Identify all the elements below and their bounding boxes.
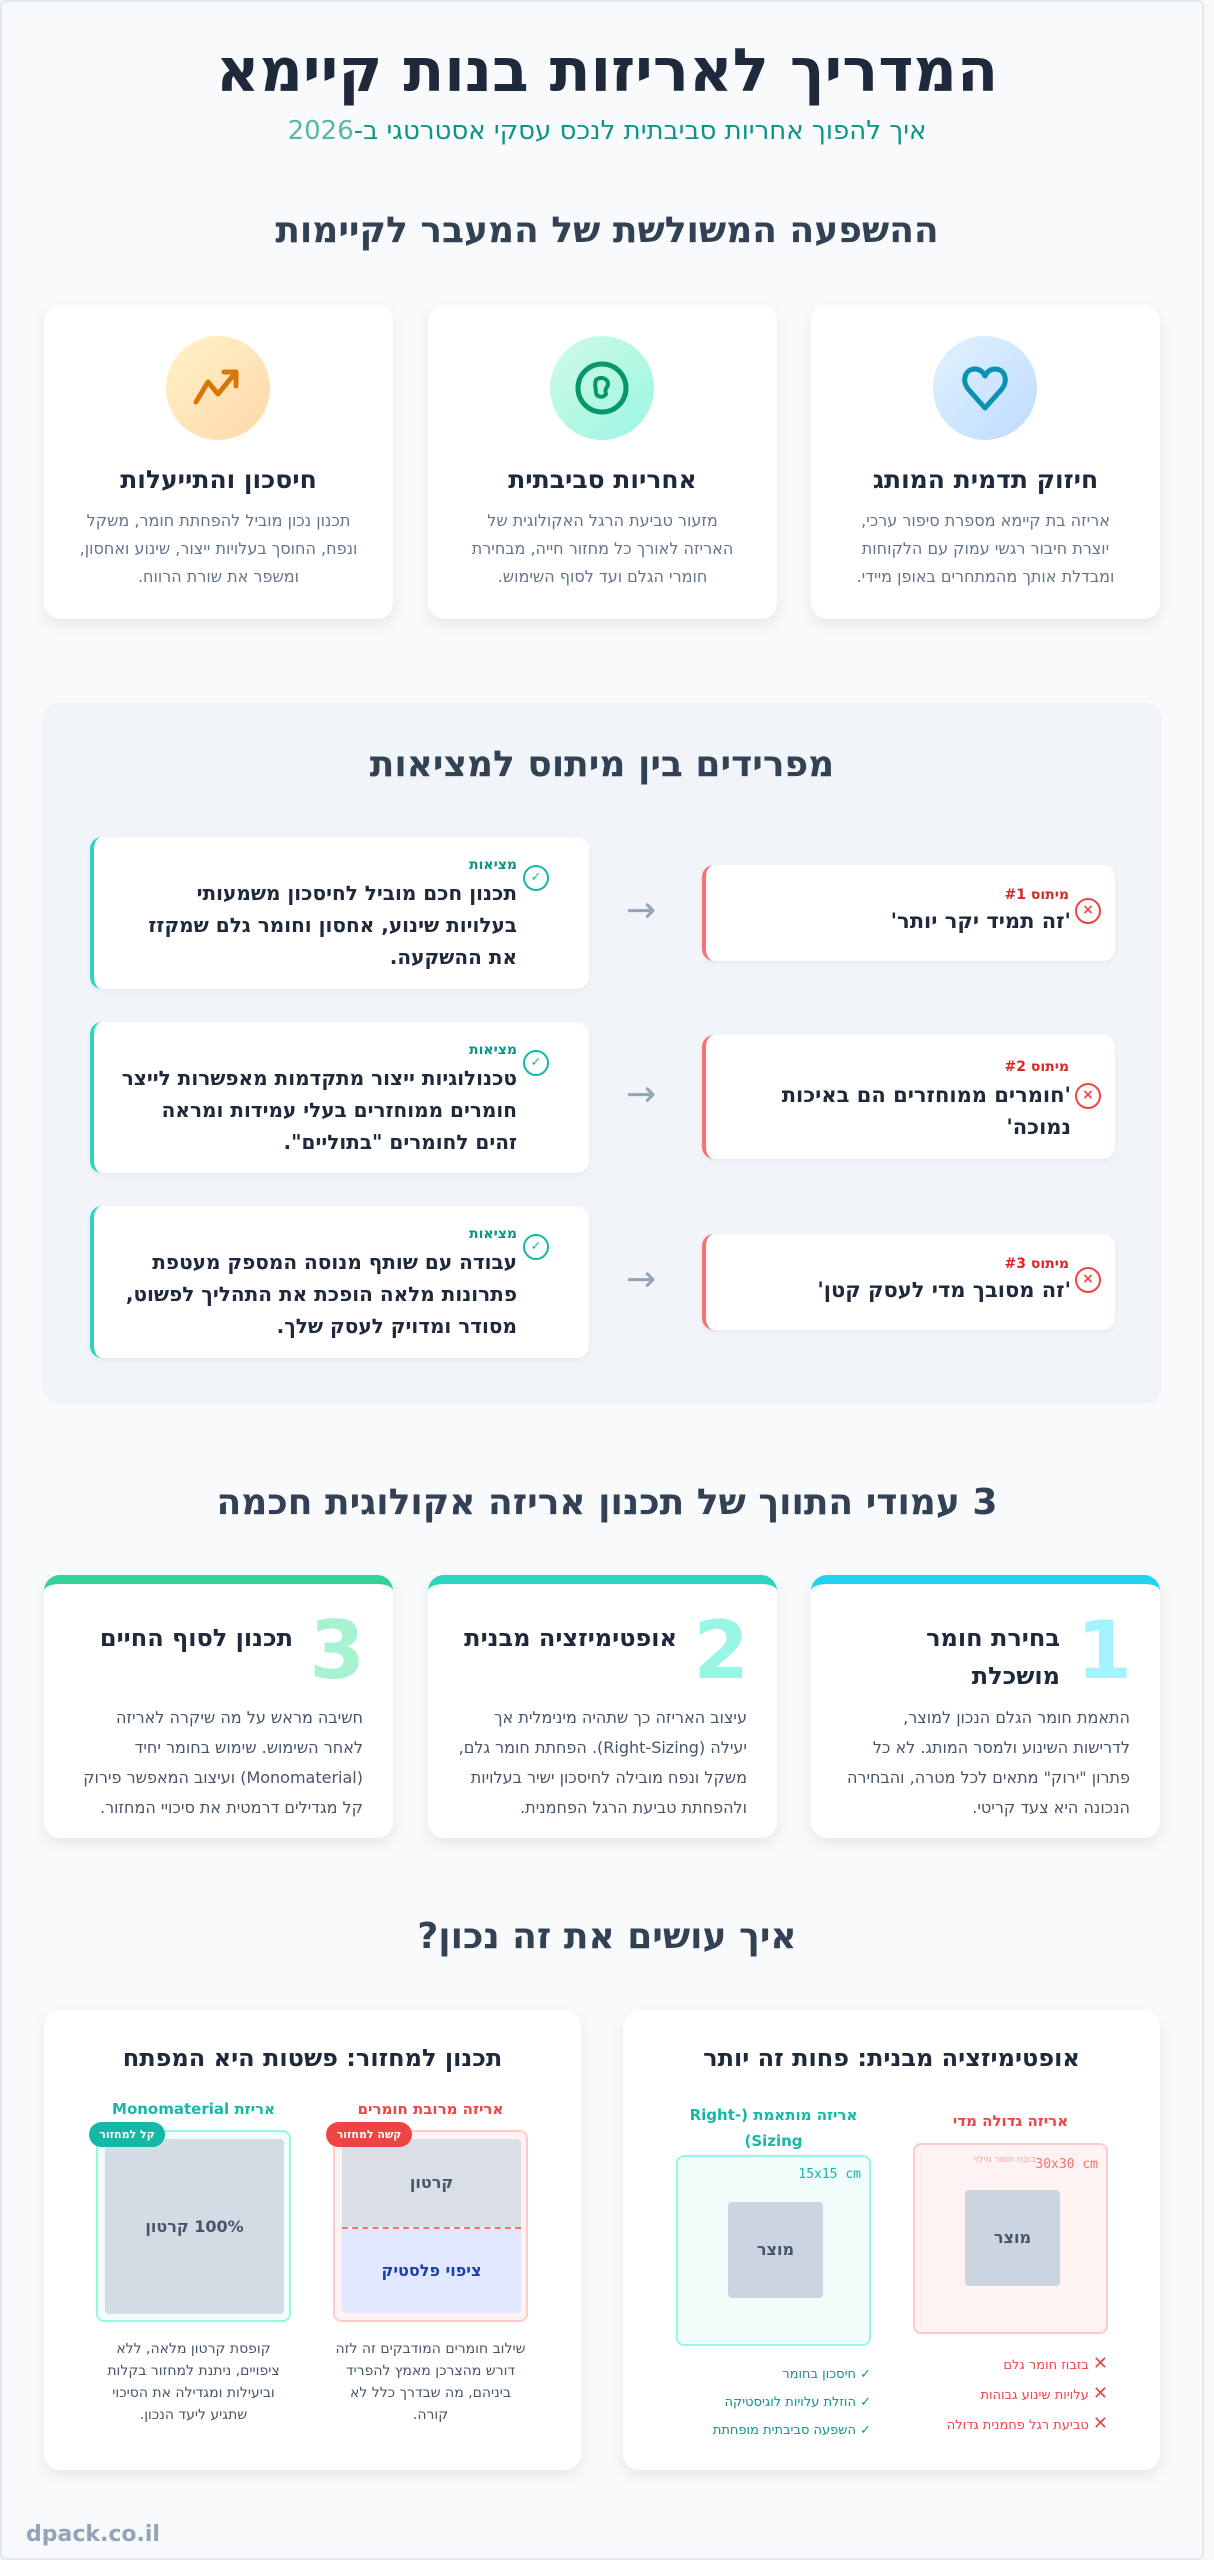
- icon: x: [1075, 1083, 1101, 1109]
- arrow 1: →: [626, 890, 656, 931]
- pillar text: עיצוב האריזה כך שתהיה מינימלית אך יעילה (Right-Sizing). הפחתת חומר גלם, משקל ונפח מובילה לחיסכון ישיר בעלויות ולהפחתת טביעת הרגל הפחמנית.: [459, 1708, 747, 1817]
- right-sized box: [676, 2106, 871, 2438]
- number: 3: [309, 1604, 365, 1697]
- icon: check: ✓: [531, 1055, 541, 1070]
- icon: x: ×: [1082, 902, 1094, 918]
- icon: check: [523, 865, 549, 891]
- reality 2: מציאות: [469, 1042, 517, 1058]
- mixed-material box: קרטון: [410, 2173, 453, 2192]
- arrow 2: →: [626, 1074, 656, 1115]
- right-sized box: 15x15 cm: [798, 2167, 861, 2182]
- oversized box: מוצר: [994, 2228, 1031, 2247]
- reality 2: [90, 1022, 589, 1173]
- reality 1: מציאות: [469, 857, 517, 873]
- badge: easy to recycle: [89, 2122, 165, 2147]
- panel title: אופטימיזציה מבנית: פחות זה יותר: [703, 2044, 1080, 2072]
- pillar title: בחירת חומר מושכלת: [926, 1624, 1060, 1690]
- list: pros: [713, 2367, 871, 2438]
- panel: savings: [44, 305, 393, 619]
- icon: x: [1075, 1267, 1101, 1293]
- right-sized box: מוצר: [757, 2240, 794, 2259]
- card title: חיזוק תדמית המותג: [873, 465, 1098, 494]
- badge: hard to recycle: קשה למחזור: [337, 2128, 401, 2141]
- mixed-material box: ציפוי פלסטיק: [382, 2261, 481, 2280]
- oversized box: אריזה גדולה מדי: [953, 2112, 1068, 2130]
- mixed-material box: אריזה מרובת חומרים: [358, 2100, 503, 2118]
- icon: x: [1075, 898, 1101, 924]
- card title: חיסכון והתייעלות: [120, 465, 317, 494]
- section heading: how to do it right: איך עושים את זה נכון?: [417, 1916, 797, 1957]
- oversized box: [913, 2112, 1108, 2434]
- panel: myth vs reality: [42, 702, 1162, 1404]
- icon: check: ✓: [531, 1239, 541, 1254]
- footer brand: dpack.co.il: [26, 2522, 160, 2547]
- mixed-material box: שילוב חומרים המודבקים זה לזה דורש מהצרכן מאמץ להפריד ביניהם, מה שבדרך כלל לא קורה.: [335, 2341, 526, 2423]
- right-sized box: אריזה מותאמת (Right-Sizing): [690, 2106, 857, 2150]
- list: pros: ✓ הוזלת עלויות לוגיסטיקה: [724, 2395, 871, 2410]
- myth 3: 'זה מסובך מדי לעסק קטן': [817, 1278, 1071, 1302]
- list: cons: ✕ עלויות שינוע גבוהות: [980, 2383, 1108, 2404]
- badge: hard to recycle: [326, 2122, 412, 2147]
- list: pros: ✓ השפעה סביבתית מופחתת: [713, 2423, 871, 2438]
- icon: check: [523, 1234, 549, 1260]
- panel: environmental responsibility: [428, 305, 777, 619]
- monomaterial box: 100% קרטון: [145, 2217, 244, 2236]
- list: cons: [947, 2353, 1108, 2434]
- icon: check: ✓: [531, 870, 541, 885]
- card text: תכנון נכון מוביל להפחתת חומר, משקל ונפח, החוסך בעלויות ייצור, שינוע ואחסון, ומשפר את שורת הרווח.: [80, 511, 357, 586]
- panel: design for recycling: [44, 2010, 581, 2470]
- monomaterial box: [89, 2100, 291, 2423]
- oversized box: 30x30 cm: [1035, 2157, 1098, 2172]
- mixed-material box: [326, 2100, 528, 2423]
- panel: brand image: [811, 305, 1160, 619]
- icon: x: ×: [1082, 1087, 1094, 1103]
- reality 3: [90, 1206, 589, 1358]
- pillar 1: [811, 1575, 1160, 1838]
- icon: check: [523, 1050, 549, 1076]
- reality 3: מציאות: [469, 1226, 517, 1242]
- pillar text: חשיבה מראש על מה שיקרה לאריזה לאחר השימוש. שימוש בחומר יחיד (Monomaterial) ועיצוב המאפשר פירוק קל מגדילים דרמטית את סיכויי המחזור.: [83, 1708, 363, 1817]
- card title: אחריות סביבתית: [508, 465, 697, 494]
- section heading: triple impact: ההשפעה המשולשת של המעבר לקיימות: [275, 210, 939, 251]
- myth 1: מיתוס #1: [1004, 887, 1069, 903]
- section heading: 3 pillars: 3 עמודי התווך של תכנון אריזה אקולוגית חכמה: [217, 1482, 997, 1523]
- number: 2: [693, 1604, 749, 1697]
- card text: אריזה בת קיימא מספרת סיפור ערכי, יוצרת חיבור רגשי עמוק עם הלקוחות ומבדלת אותך מהמתחרים באופן מיידי.: [857, 511, 1114, 586]
- myth 2: 'חומרים ממוחזרים הם באיכות נמוכה': [782, 1083, 1071, 1139]
- reality 1: [90, 837, 589, 989]
- myth 2: מיתוס #2: [1004, 1059, 1069, 1075]
- pillar title: תכנון לסוף החיים: [100, 1624, 293, 1652]
- reality 1: תכנון חכם מוביל לחיסכון משמעותי בעלויות שינוע, אחסון וחומר גלם שמקזז את ההשקעה.: [148, 881, 517, 969]
- icon: trend arrow: [166, 336, 270, 440]
- myth 1: [702, 865, 1115, 961]
- panel title: תכנון למחזור: פשטות היא המפתח: [123, 2044, 502, 2072]
- monomaterial box: קופסת קרטון מלאה, ללא ציפויים, ניתנת למחזור בקלות וביעילות ומגדילה את הסיכוי שתגיע ליעד הנכון.: [107, 2341, 280, 2423]
- list: cons: ✕ טביעת רגל פחמנית גדולה: [947, 2413, 1108, 2434]
- icon: x: ×: [1082, 1271, 1094, 1287]
- title: המדריך לאריזות בנות קיימא: [216, 36, 998, 106]
- number: 1: [1076, 1604, 1132, 1697]
- oversized box: בזבוז חומר מילוי: [974, 2155, 1036, 2165]
- badge: easy to recycle: קל למחזור: [99, 2128, 155, 2141]
- icon: heart: [933, 336, 1037, 440]
- reality 3: עבודה עם שותף מנוסה המספק מעטפת פתרונות מלאה הופכת את התהליך לפשוט, מסודר ומדויק לעסק שלך.: [126, 1250, 517, 1338]
- arrow 3: →: [626, 1259, 656, 1300]
- pillar 3: [44, 1575, 393, 1838]
- pillar 2: [428, 1575, 777, 1838]
- list: pros: ✓ חיסכון בחומר: [782, 2367, 871, 2382]
- myth 3: [702, 1234, 1115, 1330]
- icon: recycle circle: [550, 336, 654, 440]
- subtitle: איך להפוך אחריות סביבתית לנכס עסקי אסטרטגי ב-2026: [288, 116, 926, 146]
- myth 3: מיתוס #3: [1004, 1256, 1069, 1272]
- reality 2: טכנולוגיות ייצור מתקדמות מאפשרות לייצר חומרים ממוחזרים בעלי עמידות ומראה זהים לחומרים "בתוליים".: [122, 1066, 517, 1154]
- monomaterial box: אריזת Monomaterial: [112, 2100, 275, 2118]
- card text: מזעור טביעת הרגל האקולוגית של האריזה לאורך כל מחזור חייה, מבחירת חומרי הגלם ועד לסוף השימוש.: [472, 511, 733, 586]
- myth 1: 'זה תמיד יקר יותר': [891, 909, 1071, 933]
- heading: מפרידים בין מיתוס למציאות: [370, 744, 834, 785]
- list: cons: ✕ בזבוז חומר גלם: [1003, 2353, 1108, 2374]
- panel: structural optimization: [623, 2010, 1160, 2470]
- pillar title: אופטימיזציה מבנית: [464, 1624, 677, 1652]
- pillar text: התאמת חומר הגלם הנכון למוצר, לדרישות השינוע ולמסר המותג. לא כל פתרון "ירוק" מתאים לכל מטרה, והבחירה הנכונה היא צעד קריטי.: [847, 1708, 1130, 1817]
- myth 2: [702, 1035, 1115, 1159]
